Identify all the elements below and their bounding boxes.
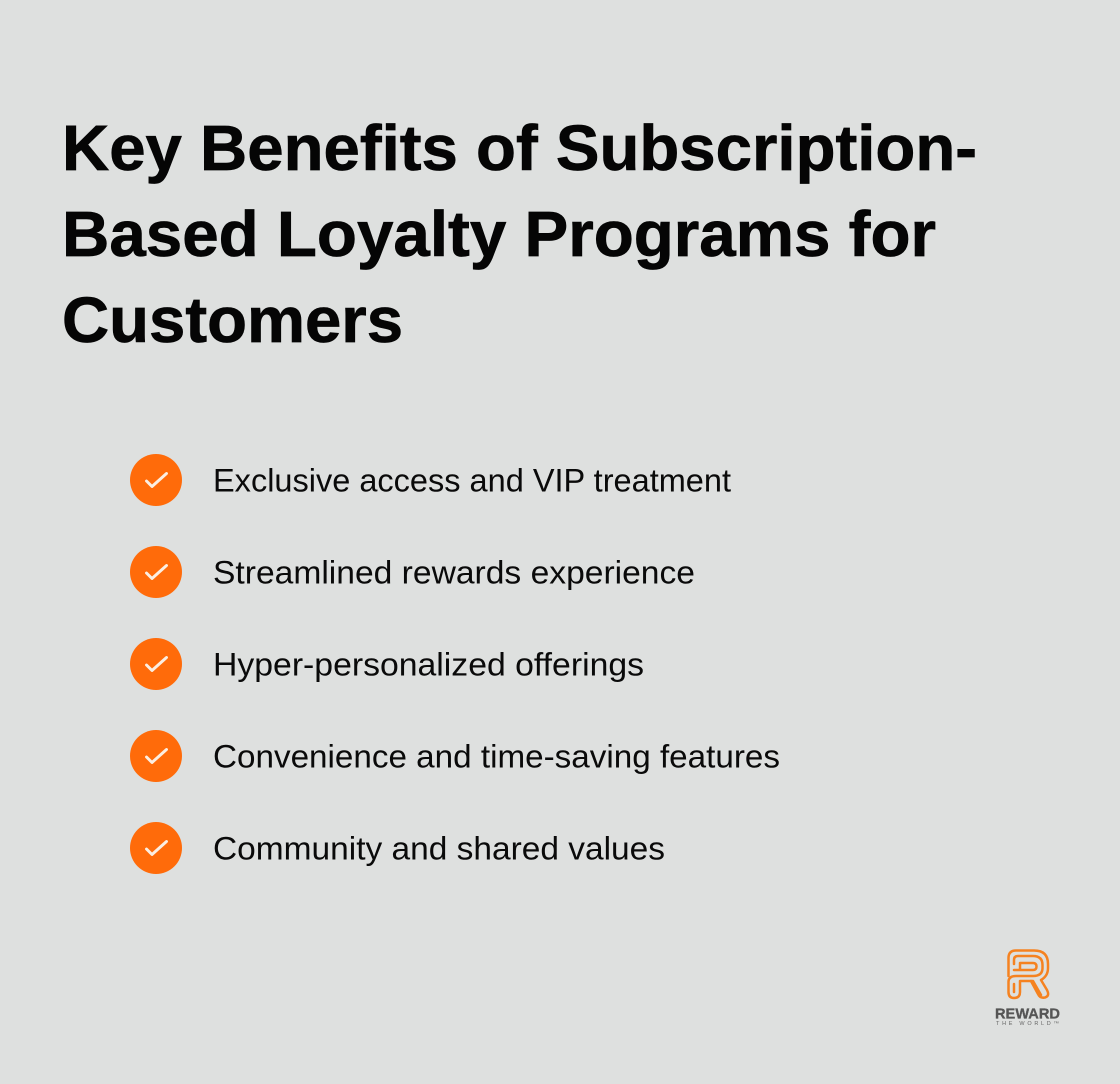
item: community bbox=[130, 822, 665, 874]
item: hyper-personalized bbox=[130, 638, 644, 690]
title: Customers bbox=[62, 284, 403, 356]
item: convenience: Convenience and time-saving features bbox=[213, 738, 780, 774]
item: hyper-personalized: Hyper-personalized offerings bbox=[213, 646, 644, 682]
item: streamlined rewards bbox=[130, 546, 695, 598]
item: convenience bbox=[130, 730, 780, 782]
logo: Reward the World bbox=[995, 950, 1060, 1027]
benefits list bbox=[130, 454, 780, 874]
title: Based Loyalty Programs for bbox=[62, 198, 936, 270]
icon: R mark bbox=[1008, 950, 1048, 998]
wordmark: REWARD bbox=[995, 1006, 1060, 1022]
item: community: Community and shared values bbox=[213, 830, 665, 866]
item: exclusive access: Exclusive access and VIP treatment bbox=[213, 462, 731, 498]
title: Key Benefits of Subscription- bbox=[62, 112, 977, 184]
item: streamlined rewards: Streamlined rewards experience bbox=[213, 554, 695, 590]
tagline: THE WORLD™ bbox=[996, 1021, 1059, 1027]
item: exclusive access bbox=[130, 454, 731, 506]
title bbox=[62, 112, 977, 356]
